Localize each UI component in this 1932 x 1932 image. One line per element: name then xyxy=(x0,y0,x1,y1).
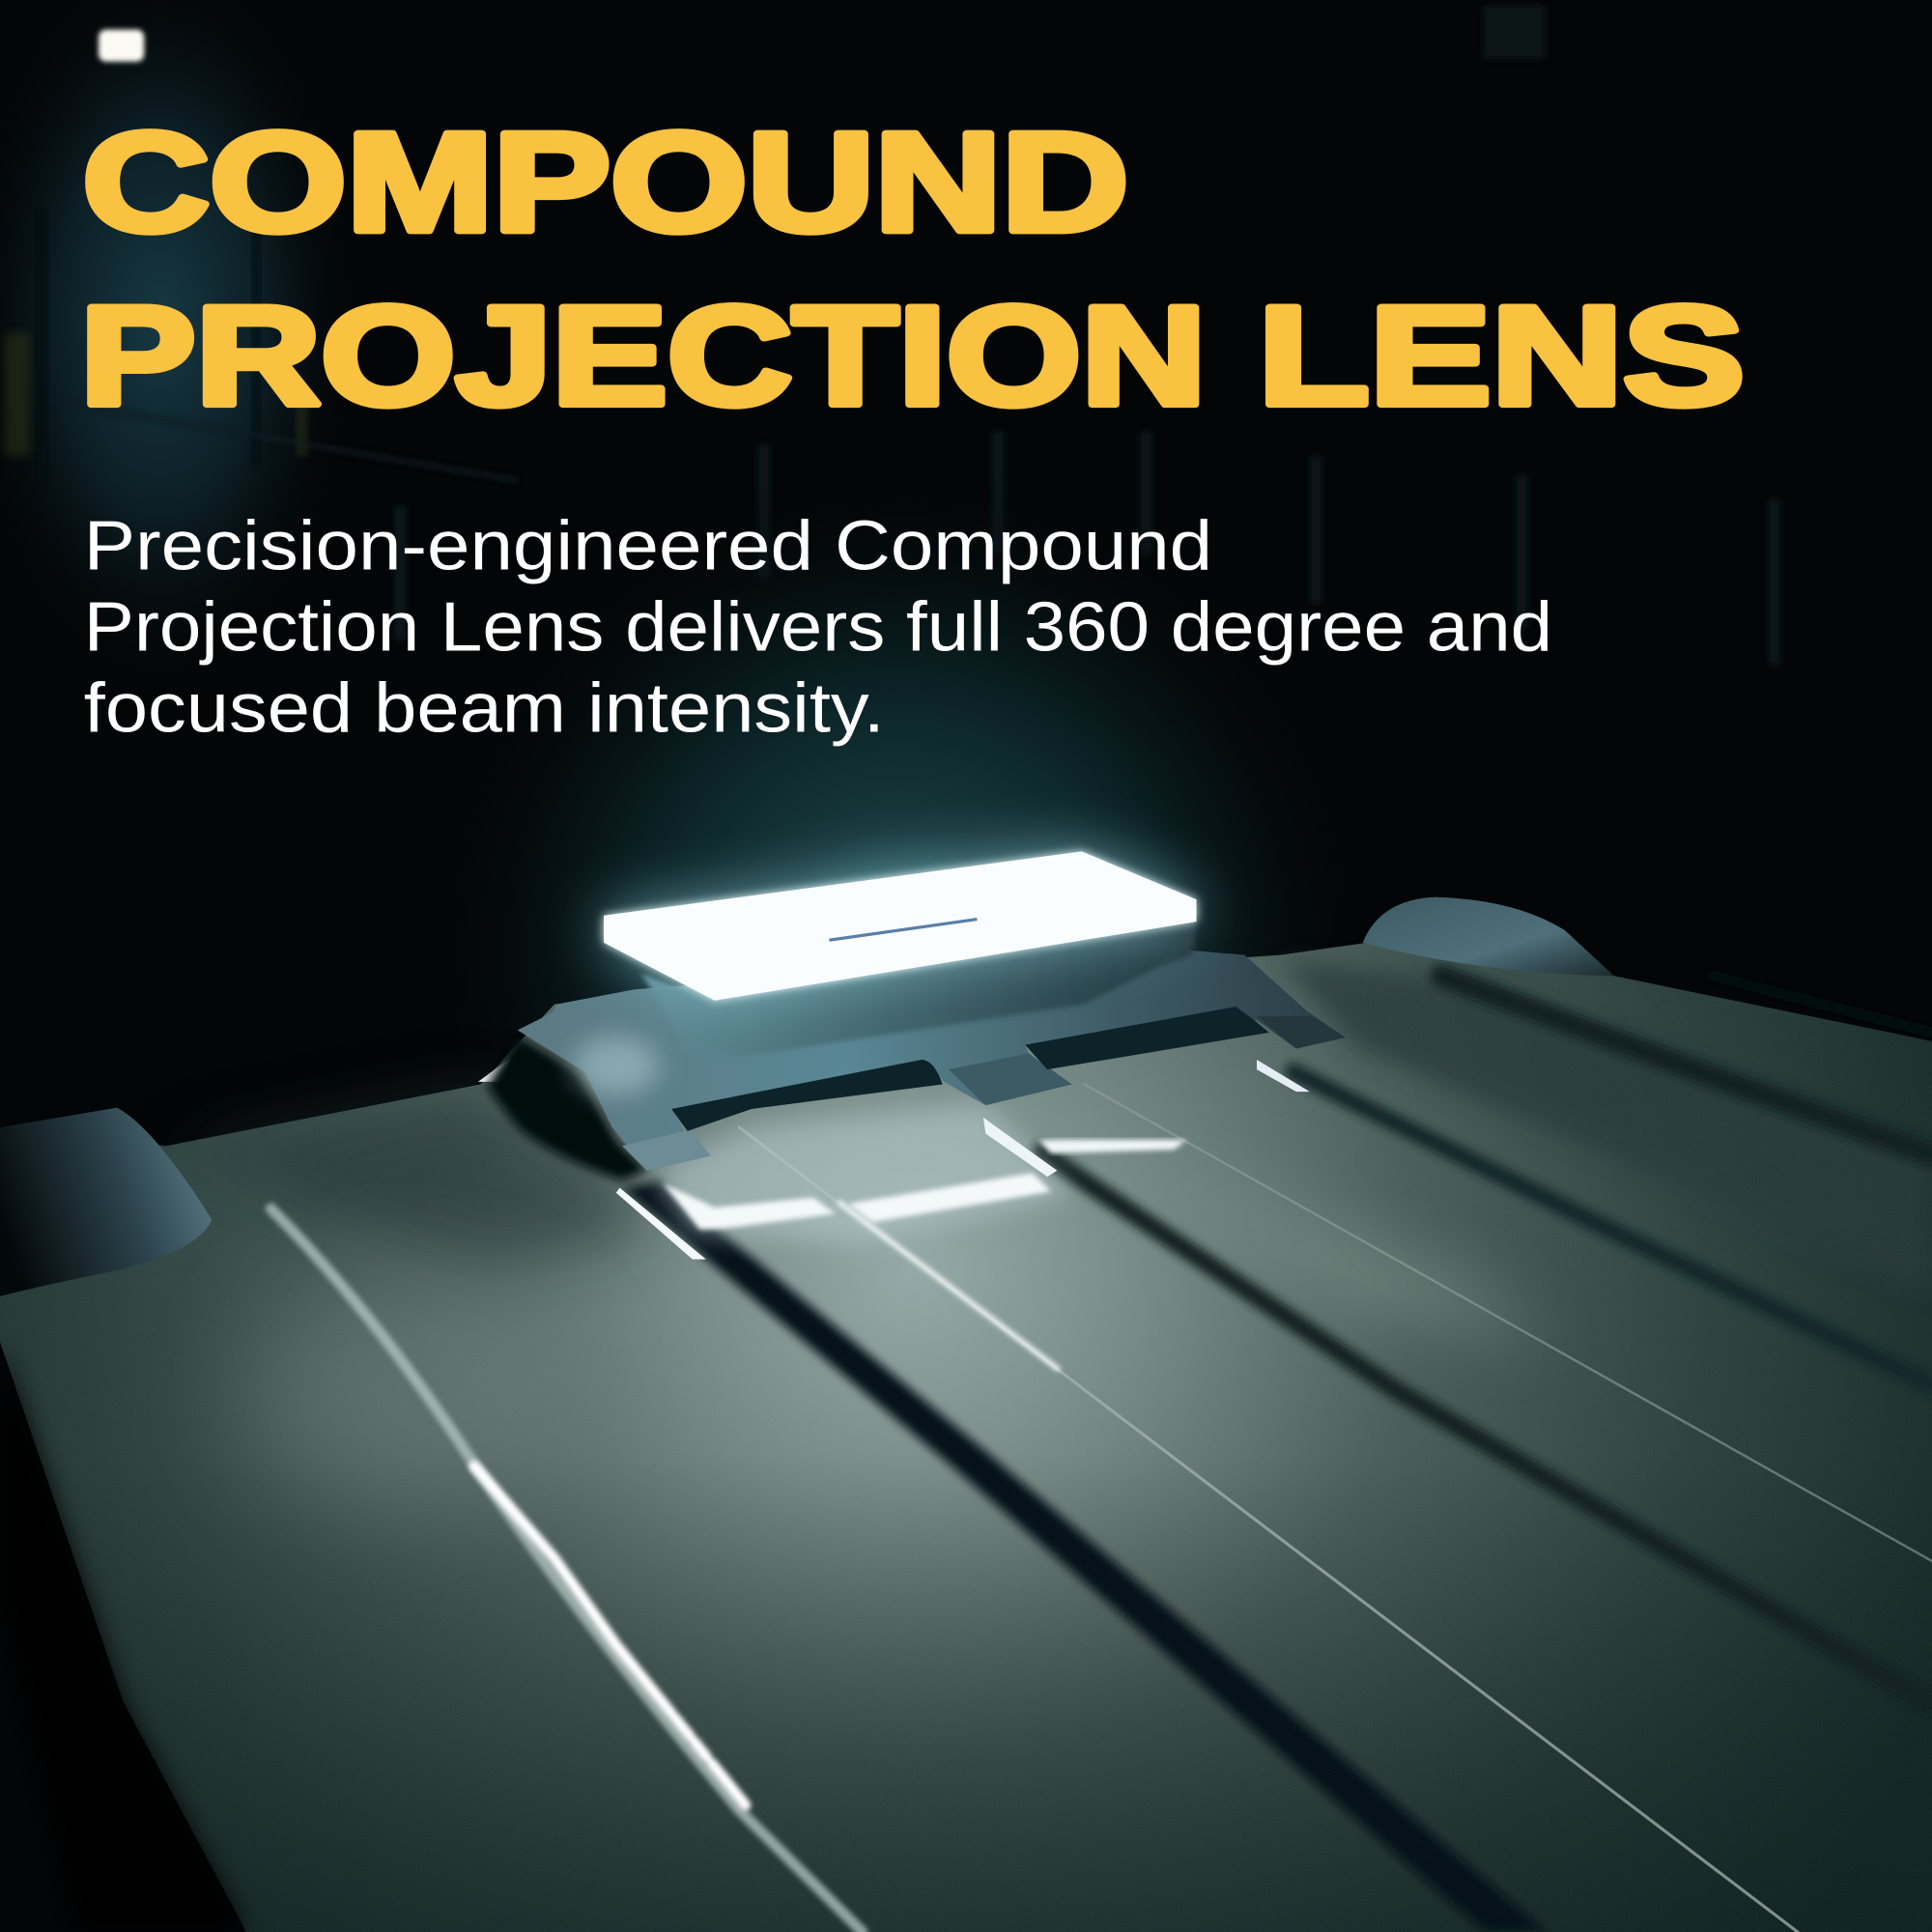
lit patch on right panel xyxy=(1146,1171,1552,1343)
title line 2 end: LENS xyxy=(1258,276,1745,434)
lamp glow wide xyxy=(604,851,1197,1001)
light reflections xyxy=(478,1057,1310,1370)
shadow beside bracket xyxy=(487,1035,647,1180)
bracket foot right xyxy=(1257,1016,1346,1048)
far groove xyxy=(1713,976,1932,1033)
description text xyxy=(84,506,1552,748)
second groove xyxy=(1041,1152,1932,1704)
left highlight soft xyxy=(271,1208,863,1932)
lens light panel xyxy=(604,851,1197,1001)
ceiling light xyxy=(99,30,144,62)
right dome xyxy=(1363,897,1614,976)
lamp heatsink xyxy=(640,922,1197,1057)
title xyxy=(80,103,1745,434)
grain texture xyxy=(0,936,1932,1932)
roof grooves xyxy=(271,976,1932,1932)
line 3: focused beam intensity. xyxy=(84,669,885,748)
thin rib: right xyxy=(1084,1084,1932,1561)
title line 1: COMPOUND xyxy=(82,103,1128,261)
bracket foot left xyxy=(622,1130,711,1171)
roof shadow band behind bracket xyxy=(166,1087,653,1269)
glow behind lamp xyxy=(407,456,1392,1441)
thin rib: centre xyxy=(739,1127,1798,1932)
recess right xyxy=(1025,1007,1269,1069)
blurred warehouse wall xyxy=(0,0,1775,739)
roof surface xyxy=(0,943,1932,1932)
line 2: Projection Lens delivers full 360 degree and xyxy=(84,587,1552,666)
bottom darkening xyxy=(132,1515,1791,1932)
lens slot xyxy=(829,920,977,940)
left dome xyxy=(0,1108,212,1296)
fourth groove xyxy=(1441,976,1932,1154)
recess left xyxy=(671,1060,943,1131)
third groove xyxy=(1293,1072,1932,1385)
line 1: Precision-engineered Compound xyxy=(84,506,1212,584)
left highlight bright xyxy=(474,1466,746,1805)
left panel blend edge xyxy=(0,1342,246,1932)
soft light on left panel xyxy=(246,1282,567,1503)
title line 2: PROJECTION xyxy=(80,276,1207,434)
bright patch on bracket xyxy=(573,1037,659,1095)
main groove xyxy=(623,1180,1547,1932)
bracket foot centre xyxy=(949,1054,1072,1105)
lamp mounting bracket xyxy=(518,949,1346,1171)
